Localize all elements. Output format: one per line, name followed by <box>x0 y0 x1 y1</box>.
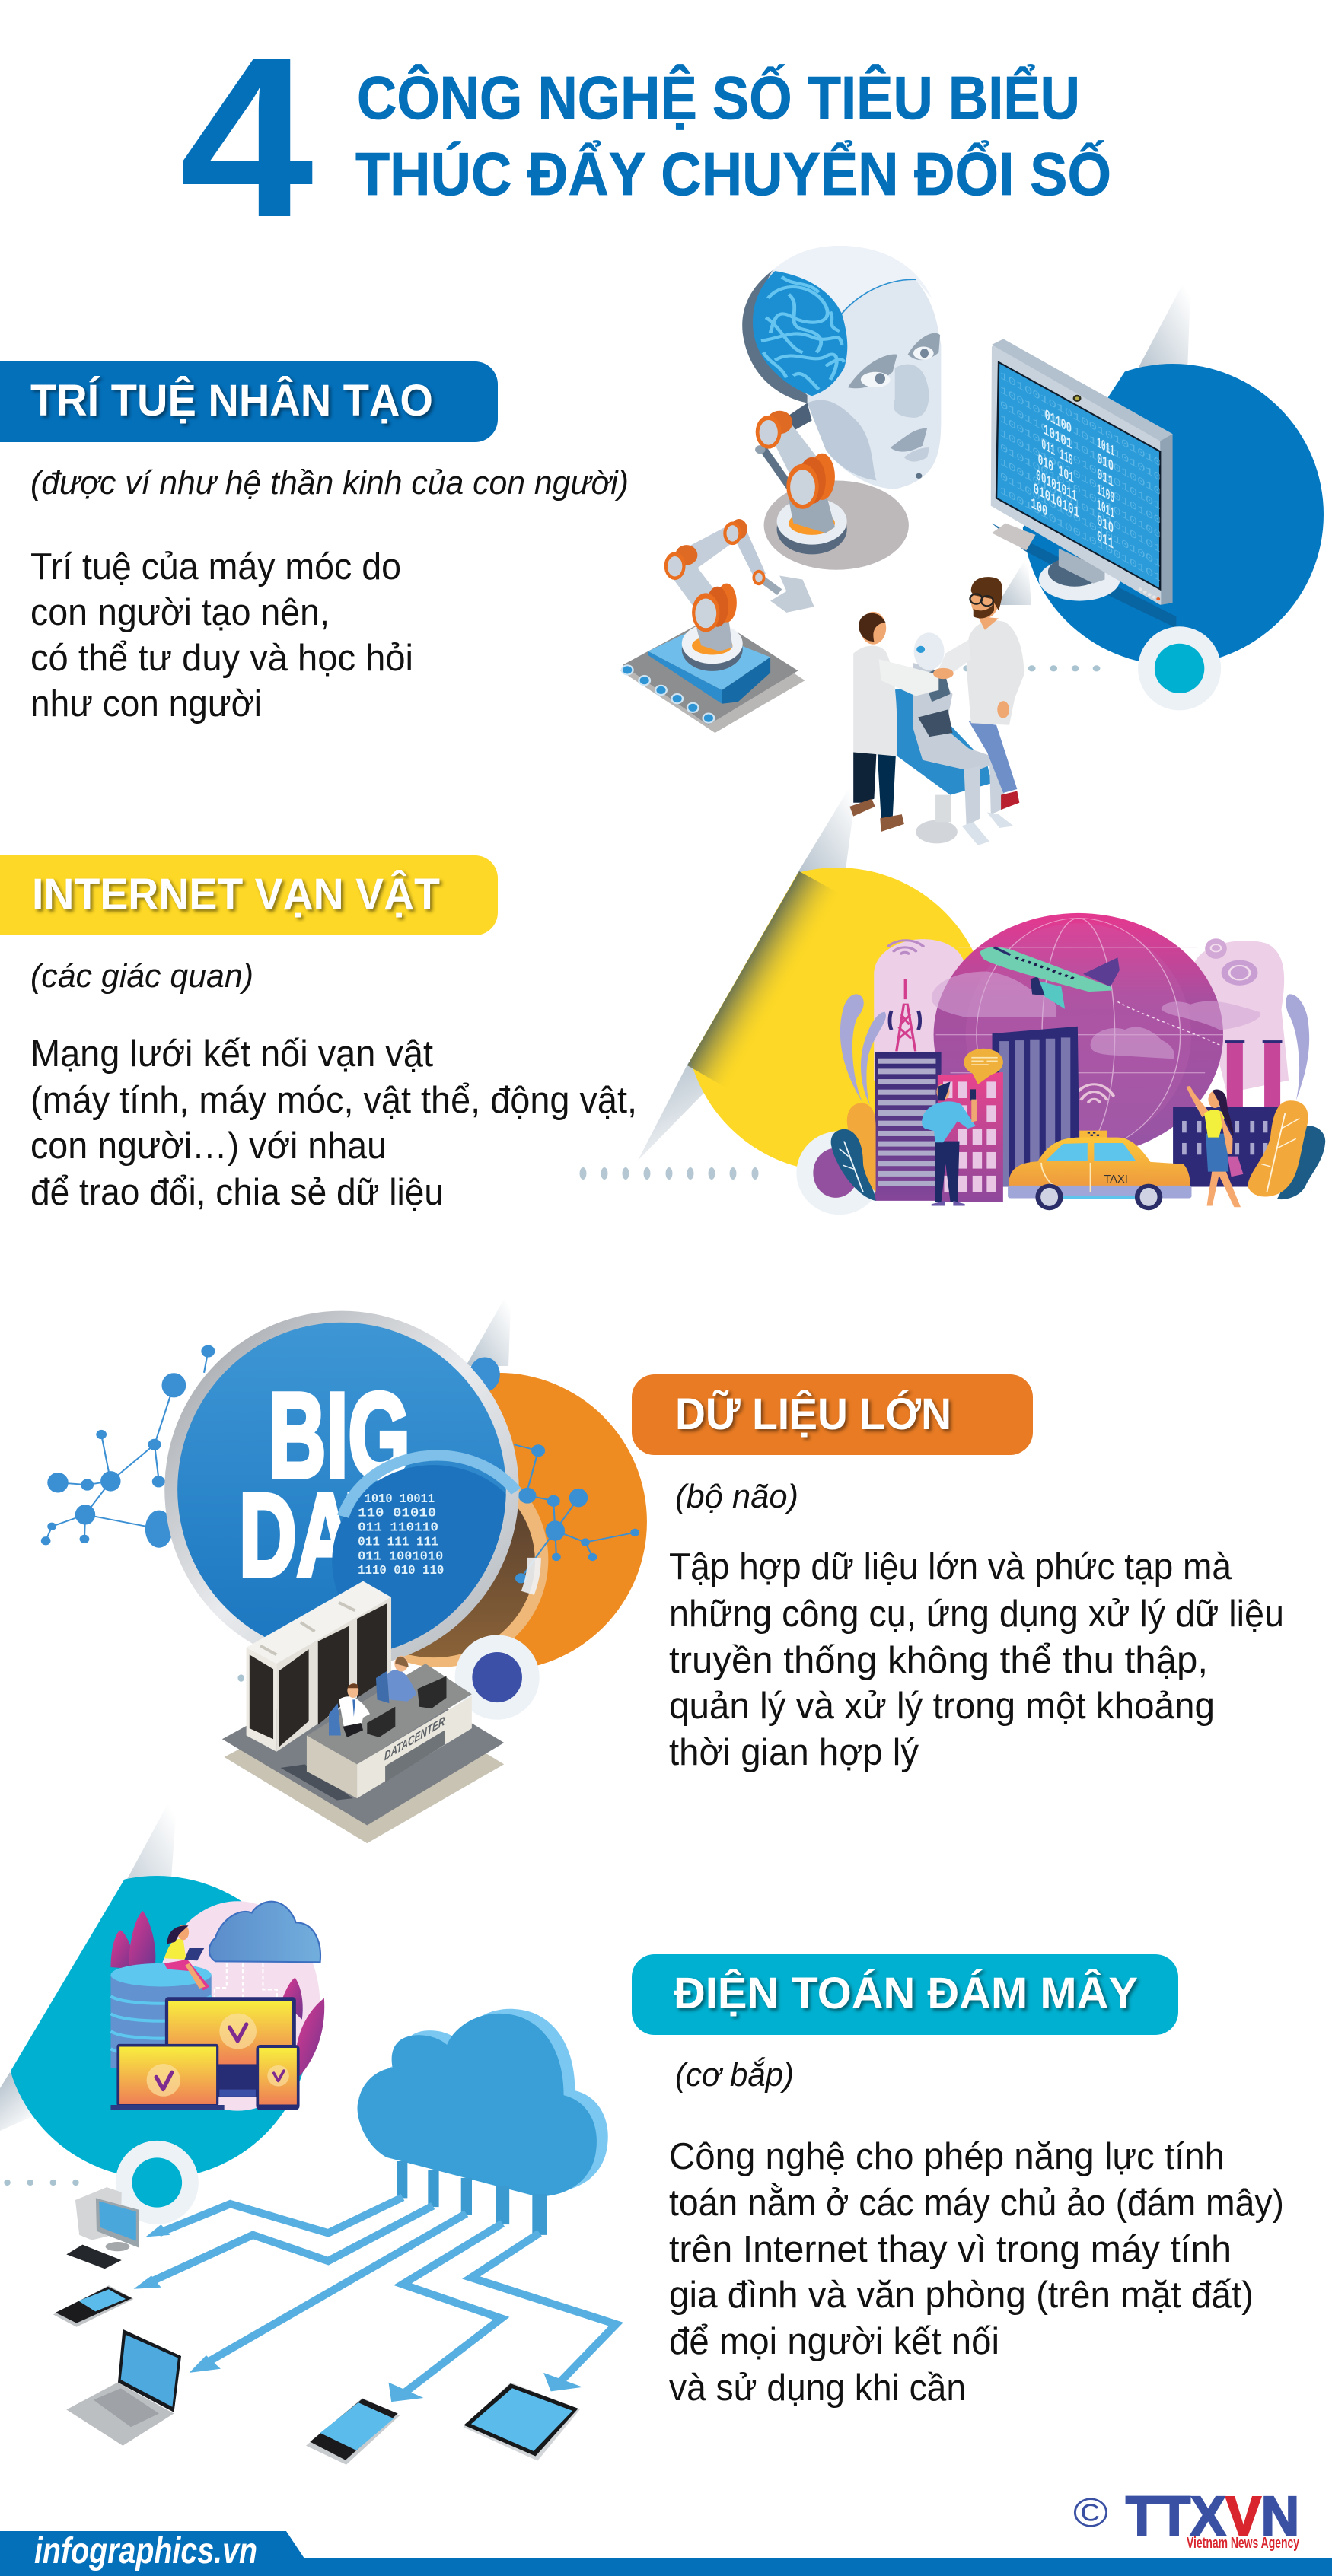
smartphone 1 <box>53 2285 134 2327</box>
flight path <box>1117 1001 1219 1045</box>
binary code in lens: 011 111 111 <box>358 1535 438 1549</box>
heading bar: IoT: INTERNET VẠN VẬT <box>32 870 440 919</box>
binary code on screen: 100 <box>1031 495 1047 521</box>
blue circle <box>1022 364 1324 665</box>
dashed links <box>215 1963 277 2039</box>
copyright mark: © <box>1073 2490 1108 2536</box>
subtitle: cloud: (cơ bắp) <box>675 2056 794 2094</box>
body text: cloud: Công nghệ cho phép năng lực tính <box>669 2136 1225 2177</box>
decorative dots and cyan ring <box>963 665 1100 671</box>
desktop computer <box>66 2187 139 2269</box>
heading bar: big data: DỮ LIỆU LỚN <box>675 1390 951 1439</box>
dark-blue ring <box>237 1635 540 1720</box>
binary code on screen: 01011001010101010010 <box>1000 398 1162 499</box>
arrows from cloud to devices <box>147 2197 616 2394</box>
cyan circle <box>4 1876 310 2179</box>
illustration: cloud computing <box>0 1876 616 2465</box>
smartphone 2 <box>306 2398 400 2465</box>
pink building <box>938 1072 1003 1202</box>
two scientists and seated robot <box>849 577 1024 845</box>
magnifier backing <box>331 1452 548 1667</box>
binary code on screen: 010 101 <box>1038 451 1074 488</box>
laptop <box>66 2329 181 2446</box>
binary code on screen: 01100101001010101001 <box>1000 470 1162 571</box>
tall dark building <box>993 1027 1080 1187</box>
body text: cloud: gia đình và văn phòng (trên mặt đất) <box>669 2275 1254 2316</box>
binary code in lens: 110 01010 <box>358 1506 436 1520</box>
tablet <box>463 2383 580 2461</box>
factory <box>1173 1040 1282 1187</box>
small blue cloud <box>209 1902 320 1962</box>
body text: big data: thời gian hợp lý <box>669 1732 919 1773</box>
website label: infographics.vn <box>34 2531 257 2571</box>
body text: AI: Trí tuệ của máy móc do <box>30 546 401 587</box>
title numeral 4: 4 <box>180 9 315 265</box>
binary code on screen: 10010101001010010101 <box>1000 484 1162 585</box>
network right <box>470 1358 639 1582</box>
body text: AI <box>30 546 413 724</box>
computer monitor <box>991 339 1176 628</box>
body text: cloud: để mọi người kết nối <box>669 2321 999 2362</box>
illustration: big data <box>0 1286 1332 2576</box>
cyan ring and dots <box>4 2141 199 2224</box>
panel: cloud computing text <box>632 1954 1284 2409</box>
body text: cloud <box>669 2136 1284 2409</box>
robot arm 2 on tracks <box>620 519 814 733</box>
heading bar: IoT <box>0 855 498 935</box>
body text: IoT: để trao đổi, chia sẻ dữ liệu <box>30 1172 444 1213</box>
screens with check marks <box>110 1997 300 2110</box>
binary code on screen <box>1000 369 1162 585</box>
binary code on screen: 10010101010100101010 <box>1000 384 1162 485</box>
big data disc: DAT <box>239 1469 397 1600</box>
panel: big data text <box>632 1374 1284 1773</box>
taxi label: TAXI <box>1104 1173 1128 1185</box>
body text: cloud: trên Internet thay vì trong máy tính <box>669 2229 1232 2270</box>
binary code on screen: 010 <box>1097 450 1114 476</box>
binary code on screen: 011 <box>1097 527 1114 553</box>
binary code on screen: 1100 <box>1097 481 1114 507</box>
robot head <box>742 246 941 570</box>
binary code in lens: 1110 010 110 <box>358 1564 444 1578</box>
wisps <box>840 994 1309 1106</box>
binary code in lens: 1010 10011 <box>365 1492 435 1506</box>
binary code on screen: 10100101010010101010 <box>1000 369 1162 470</box>
woman pointing <box>1186 1086 1243 1207</box>
footer band <box>0 2531 1332 2576</box>
heading bar: AI: TRÍ TUỆ NHÂN TẠO <box>30 376 433 425</box>
binary code on screen: 010 <box>1097 512 1114 538</box>
large cloud <box>358 2009 608 2235</box>
binary code on screen: 10010101010101010101 <box>1000 456 1162 556</box>
title <box>180 9 1111 265</box>
purple ring <box>796 1131 882 1215</box>
body text: AI: con người tạo nên, <box>30 592 330 633</box>
clouds <box>932 972 1260 1059</box>
arrowheads <box>134 2224 582 2402</box>
agency wordmark: TTXVN <box>1126 2486 1299 2547</box>
body text: cloud: và sử dụng khi cần <box>669 2367 966 2409</box>
subtitle: IoT: (các giác quan) <box>30 957 253 995</box>
binary code on screen: 01100 <box>1045 406 1072 438</box>
body text: IoT: Mạng lưới kết nối vạn vật <box>30 1033 433 1075</box>
small cloud scene <box>110 1901 324 2111</box>
binary code on screen: 10010010101001010101 <box>1000 412 1162 513</box>
woman on database <box>164 1925 209 1991</box>
binary code on screen: 00101011 <box>1036 466 1076 505</box>
magnifier lens <box>332 1465 506 1648</box>
gear icon <box>1211 944 1257 986</box>
title line 2: THÚC ĐẨY CHUYỂN ĐỔI SỐ <box>355 140 1111 208</box>
datacenter <box>222 1581 504 1843</box>
orange circle <box>349 1373 647 1671</box>
plants <box>831 1100 1325 1201</box>
logo: TTXVN <box>1073 2486 1300 2552</box>
heading bar: big data <box>632 1374 1033 1455</box>
binary code on screen: 01010010101001010100 <box>1000 441 1162 542</box>
body text: IoT: con người…) với nhau <box>30 1126 387 1167</box>
man with phone <box>922 1081 977 1206</box>
yellow circle <box>685 868 989 1172</box>
panel: internet of things text <box>0 855 637 1213</box>
server racks <box>247 1581 391 1752</box>
network left <box>42 1345 214 1547</box>
BIG DATA lettering: BIG <box>269 1368 410 1503</box>
robot arm 1 <box>755 403 847 554</box>
big data disc <box>164 1311 535 1668</box>
body text: big data: truyền thống không thể thu thập, <box>669 1640 1208 1681</box>
title line 1: CÔNG NGHỆ SỐ TIÊU BIỂU <box>357 64 1080 132</box>
radio tower <box>890 979 920 1051</box>
wifi icons <box>888 941 1114 1102</box>
body text: big data: quản lý và xử lý trong một khoảng <box>669 1686 1215 1727</box>
body text: big data <box>669 1546 1284 1773</box>
binary code in lens <box>358 1492 444 1578</box>
heading bar: AI <box>0 361 498 442</box>
airplane <box>980 947 1120 1009</box>
body text: big data: Tập hợp dữ liệu lớn và phức tạp mà <box>669 1546 1232 1587</box>
binary code on screen: 011 110 <box>1041 436 1073 470</box>
body text: AI: có thể tư duy và học hỏi <box>30 638 413 679</box>
striped building <box>875 1052 942 1201</box>
database stack <box>110 1963 212 2068</box>
heading bar: cloud: ĐIỆN TOÁN ĐÁM MÂY <box>674 1969 1138 2018</box>
binary code on screen: 011 <box>1097 465 1114 491</box>
binary code in lens: 011 110110 <box>358 1520 438 1535</box>
speech bubble <box>964 1049 1003 1084</box>
pale blobs <box>874 939 1289 1093</box>
subtitle: big data: (bộ não) <box>675 1478 798 1515</box>
binary code on screen: 1011 <box>1097 435 1114 460</box>
binary code on screen: 10010100101010010100 <box>1000 427 1162 527</box>
taxi <box>1008 1131 1191 1210</box>
body text: IoT: (máy tính, máy móc, vật thể, động vật, <box>30 1080 637 1121</box>
binary code on screen: 01010101 <box>1034 480 1079 522</box>
panel: artificial intelligence text <box>0 361 629 724</box>
heading bar: cloud <box>632 1954 1178 2035</box>
datacenter sign: DATACENTER <box>384 1713 445 1763</box>
subtitle: AI: (được ví như hệ thần kinh của con người) <box>30 464 629 502</box>
binary code in lens: 011 1001010 <box>358 1549 443 1564</box>
illustration: smart city IoT <box>580 868 1325 1215</box>
body text: AI: như con người <box>30 683 262 724</box>
binary code on screen: 1011 <box>1097 496 1114 523</box>
body text: IoT <box>30 1033 637 1213</box>
illustration: AI robots and monitor <box>620 246 1324 875</box>
binary code on screen: 10101 <box>1044 421 1072 454</box>
body text: cloud: toán nằm ở các máy chủ ảo (đám mây) <box>669 2183 1284 2224</box>
desk and operators <box>307 1656 472 1798</box>
dotted line <box>580 1167 758 1180</box>
body text: big data: những công cụ, ứng dụng xử lý dữ liệu <box>669 1594 1284 1635</box>
globe <box>934 913 1223 1157</box>
